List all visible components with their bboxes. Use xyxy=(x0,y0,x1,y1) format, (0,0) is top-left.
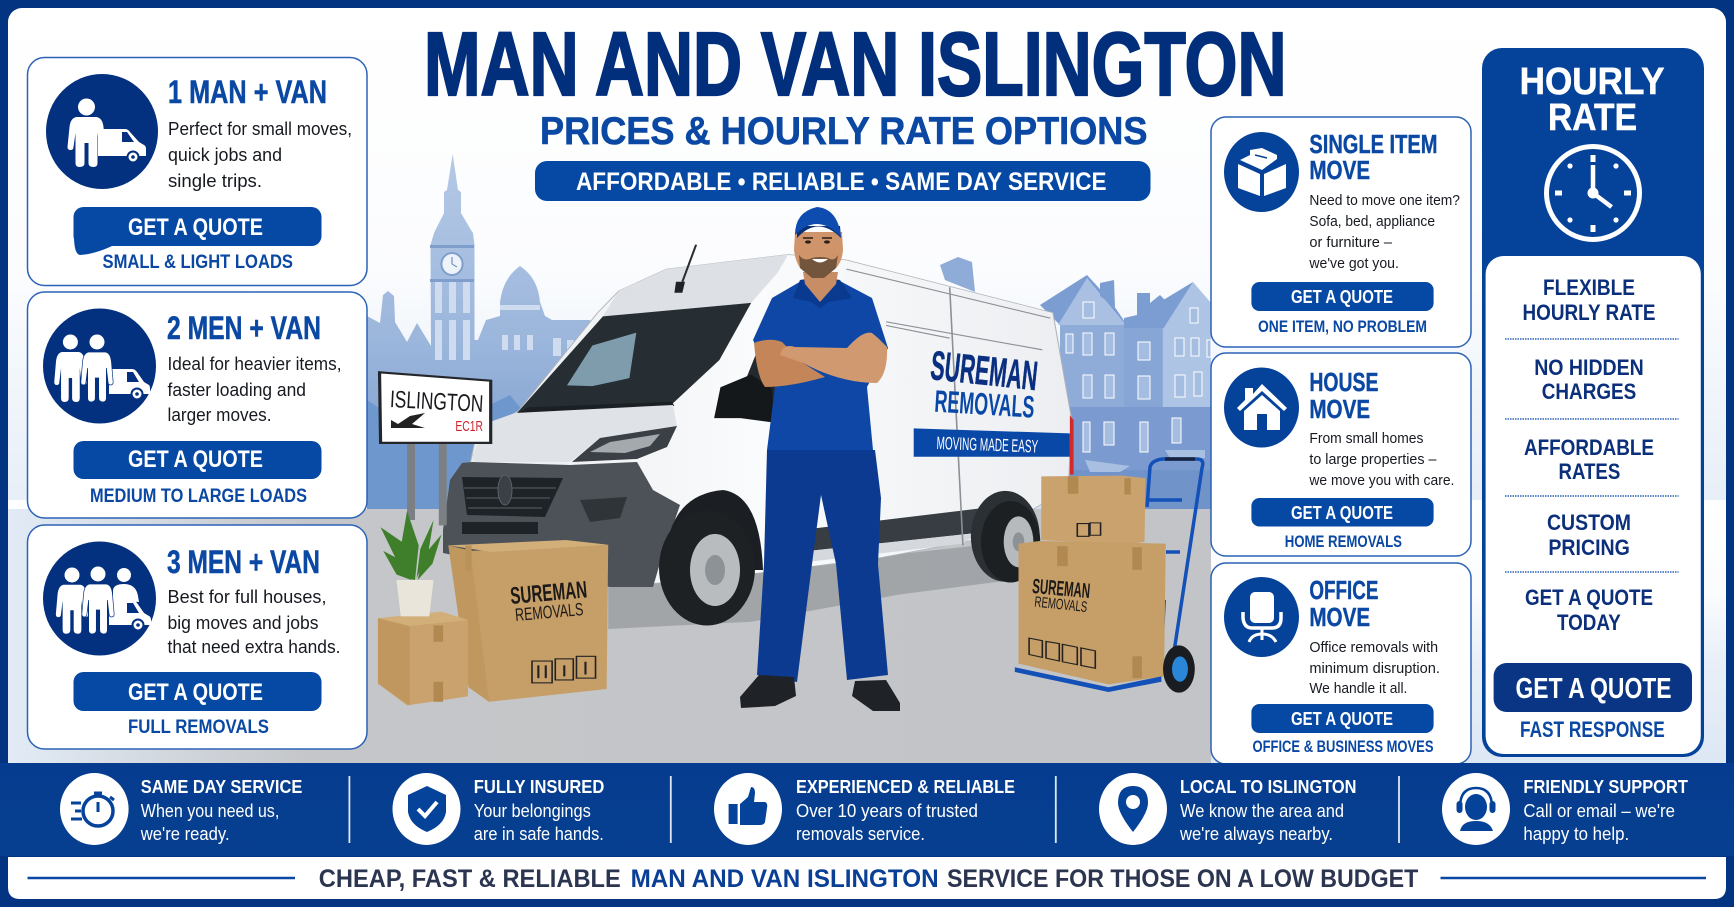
skyline: townhouses right xyxy=(940,257,1211,509)
feature: friendly support: happy to help. xyxy=(1523,824,1629,844)
benefits list: CUSTOM xyxy=(1547,510,1631,535)
caption: HOME REMOVALS xyxy=(1285,533,1402,551)
feature: local to islington: we're always nearby. xyxy=(1179,824,1333,844)
heading: MOVE xyxy=(1309,394,1370,424)
button xyxy=(74,207,322,255)
button xyxy=(74,441,322,479)
sign lettering: ISLINGTON xyxy=(389,386,484,418)
slogan: SERVICE FOR THOSE ON A LOW BUDGET xyxy=(947,865,1418,893)
boxes right xyxy=(1015,476,1195,693)
van lettering: REMOVALS xyxy=(934,384,1036,425)
benefits list: NO HIDDEN xyxy=(1534,355,1644,380)
trolley xyxy=(1147,459,1203,675)
icon: office chair xyxy=(1224,577,1299,657)
button xyxy=(1251,498,1434,526)
description: quick jobs and xyxy=(168,144,282,165)
feature: local to islington xyxy=(1099,773,1356,845)
benefits list: CHARGES xyxy=(1542,379,1636,404)
description: single trips. xyxy=(168,170,262,191)
heading: SINGLE ITEM xyxy=(1309,129,1437,159)
title: MAN AND VAN ISLINGTON xyxy=(424,15,1286,115)
feature: experienced and reliable xyxy=(714,773,1015,845)
feature: same day service xyxy=(60,773,302,845)
caption: FULL REMOVALS xyxy=(128,717,269,738)
van front xyxy=(443,405,763,625)
caption: MEDIUM TO LARGE LOADS xyxy=(90,486,307,507)
description: Need to move one item? xyxy=(1309,192,1460,209)
panel: 1 man + van xyxy=(28,58,367,286)
box lettering: SUREMAN xyxy=(1031,575,1091,603)
feature: fully insured: are in safe hands. xyxy=(474,824,604,844)
heading: MOVE xyxy=(1309,155,1370,185)
footer strip xyxy=(0,856,1734,907)
icon: three men and van xyxy=(43,542,156,656)
description: We handle it all. xyxy=(1309,680,1407,697)
benefits list: GET A QUOTE xyxy=(1525,585,1653,610)
box lettering xyxy=(509,575,1091,625)
description: big moves and jobs xyxy=(168,612,318,633)
feature: fully insured: FULLY INSURED xyxy=(474,776,604,797)
box lettering: REMOVALS xyxy=(1034,594,1088,616)
button xyxy=(1251,704,1434,733)
icon: one man and van xyxy=(46,74,158,189)
panel: office move xyxy=(1211,563,1471,764)
button: GET A QUOTE xyxy=(1291,503,1393,523)
feature: friendly support: Call or email – we're xyxy=(1523,801,1675,821)
description xyxy=(1309,639,1440,697)
tagline pill xyxy=(535,161,1150,201)
description: we've got you. xyxy=(1308,255,1399,272)
button: GET A QUOTE xyxy=(128,446,263,473)
button: GET A QUOTE xyxy=(1516,673,1672,705)
sign lettering: EC1R xyxy=(455,418,483,435)
features band xyxy=(0,763,1734,857)
hero scene: van, mover, boxes and skyline xyxy=(8,154,1211,763)
description: Best for full houses, xyxy=(168,586,326,607)
feature: experienced and reliable: EXPERIENCED & RELIABLE xyxy=(796,776,1015,797)
feature: fully insured: Your belongings xyxy=(474,801,591,821)
heading: HOURLY xyxy=(1520,61,1665,103)
description: minimum disruption. xyxy=(1309,660,1440,677)
skyline: London buildings left xyxy=(367,154,600,509)
caption: SMALL & LIGHT LOADS xyxy=(102,252,293,273)
heading: 1 MAN + VAN xyxy=(168,74,327,110)
heading: 3 MEN + VAN xyxy=(167,544,320,580)
benefits list: PRICING xyxy=(1548,535,1630,560)
button: GET A QUOTE xyxy=(1291,287,1393,307)
benefits list xyxy=(1486,256,1701,754)
feature: friendly support: FRIENDLY SUPPORT xyxy=(1523,776,1688,797)
heading: OFFICE xyxy=(1309,575,1378,605)
caption: ONE ITEM, NO PROBLEM xyxy=(1258,318,1427,336)
caption: FAST RESPONSE xyxy=(1520,717,1665,742)
feature: local to islington: We know the area and xyxy=(1180,801,1344,821)
caption: OFFICE & BUSINESS MOVES xyxy=(1252,738,1434,756)
panel: 3 men + van xyxy=(28,525,367,749)
panel: 2 men + van xyxy=(28,292,367,518)
feature: friendly support xyxy=(1442,773,1688,845)
description: Office removals with xyxy=(1309,639,1438,656)
tagline pill: AFFORDABLE • RELIABLE • SAME DAY SERVICE xyxy=(576,168,1107,196)
benefits list: TODAY xyxy=(1557,610,1621,635)
heading: 2 MEN + VAN xyxy=(167,310,321,346)
feature: experienced and reliable: removals service. xyxy=(796,824,925,844)
description: faster loading and xyxy=(168,379,306,400)
feature: same day service: When you need us, xyxy=(141,801,279,821)
mover xyxy=(740,207,900,711)
panel: house move xyxy=(1211,353,1471,556)
panel: hourly rate xyxy=(1482,48,1704,757)
description xyxy=(168,118,352,191)
description: Sofa, bed, appliance xyxy=(1309,213,1435,230)
description: Perfect for small moves, xyxy=(168,118,352,139)
description: we move you with care. xyxy=(1308,472,1454,489)
button: GET A QUOTE xyxy=(128,679,263,706)
heading: RATE xyxy=(1548,97,1637,139)
description: larger moves. xyxy=(168,404,272,425)
van lettering: MOVING MADE EASY xyxy=(936,433,1038,457)
description xyxy=(1308,430,1454,489)
van lettering: SUREMAN xyxy=(929,342,1040,399)
slogan: MAN AND VAN ISLINGTON xyxy=(631,865,939,893)
subtitle: PRICES & HOURLY RATE OPTIONS xyxy=(540,110,1148,153)
icon: house xyxy=(1224,368,1299,448)
street sign xyxy=(380,372,491,443)
slogan xyxy=(319,865,1418,893)
plant xyxy=(381,511,441,616)
feature: same day service: SAME DAY SERVICE xyxy=(141,776,302,797)
button xyxy=(1251,282,1434,311)
description xyxy=(168,353,342,425)
panel: single item move xyxy=(1211,117,1471,347)
sign lettering xyxy=(389,386,484,435)
van xyxy=(378,245,1074,705)
icon: two men and van xyxy=(43,308,156,424)
button: GET A QUOTE xyxy=(128,214,263,241)
box lettering: SUREMAN xyxy=(509,576,588,610)
van lettering xyxy=(929,342,1040,457)
button xyxy=(1494,663,1692,712)
benefits list: FLEXIBLE xyxy=(1543,275,1635,300)
heading xyxy=(1309,129,1437,185)
boxes left xyxy=(378,540,608,705)
feature: same day service: we're ready. xyxy=(140,824,230,844)
feature: experienced and reliable: Over 10 years of trusted xyxy=(796,801,978,821)
slogan: CHEAP, FAST & RELIABLE xyxy=(319,865,621,893)
heading: HOUSE xyxy=(1309,367,1378,397)
heading xyxy=(1309,575,1378,632)
description xyxy=(168,586,340,657)
feature: local to islington: LOCAL TO ISLINGTON xyxy=(1180,776,1356,797)
heading: MOVE xyxy=(1309,602,1370,632)
description: that need extra hands. xyxy=(168,636,340,657)
description: Ideal for heavier items, xyxy=(168,353,342,374)
icon: clock xyxy=(1546,146,1640,240)
description xyxy=(1308,192,1460,272)
description: to large properties – xyxy=(1309,451,1437,468)
heading xyxy=(1520,61,1665,139)
button xyxy=(74,672,322,711)
heading xyxy=(1309,367,1378,424)
description: From small homes xyxy=(1309,430,1423,447)
feature: fully insured xyxy=(392,773,604,845)
benefits list: AFFORDABLE xyxy=(1524,435,1654,460)
description: or furniture – xyxy=(1309,234,1393,251)
icon: box xyxy=(1224,132,1299,212)
button: GET A QUOTE xyxy=(1291,709,1393,729)
box lettering: REMOVALS xyxy=(514,599,584,625)
street sign posts xyxy=(407,444,447,525)
benefits list: HOURLY RATE xyxy=(1522,300,1656,325)
benefits list: RATES xyxy=(1558,459,1620,484)
